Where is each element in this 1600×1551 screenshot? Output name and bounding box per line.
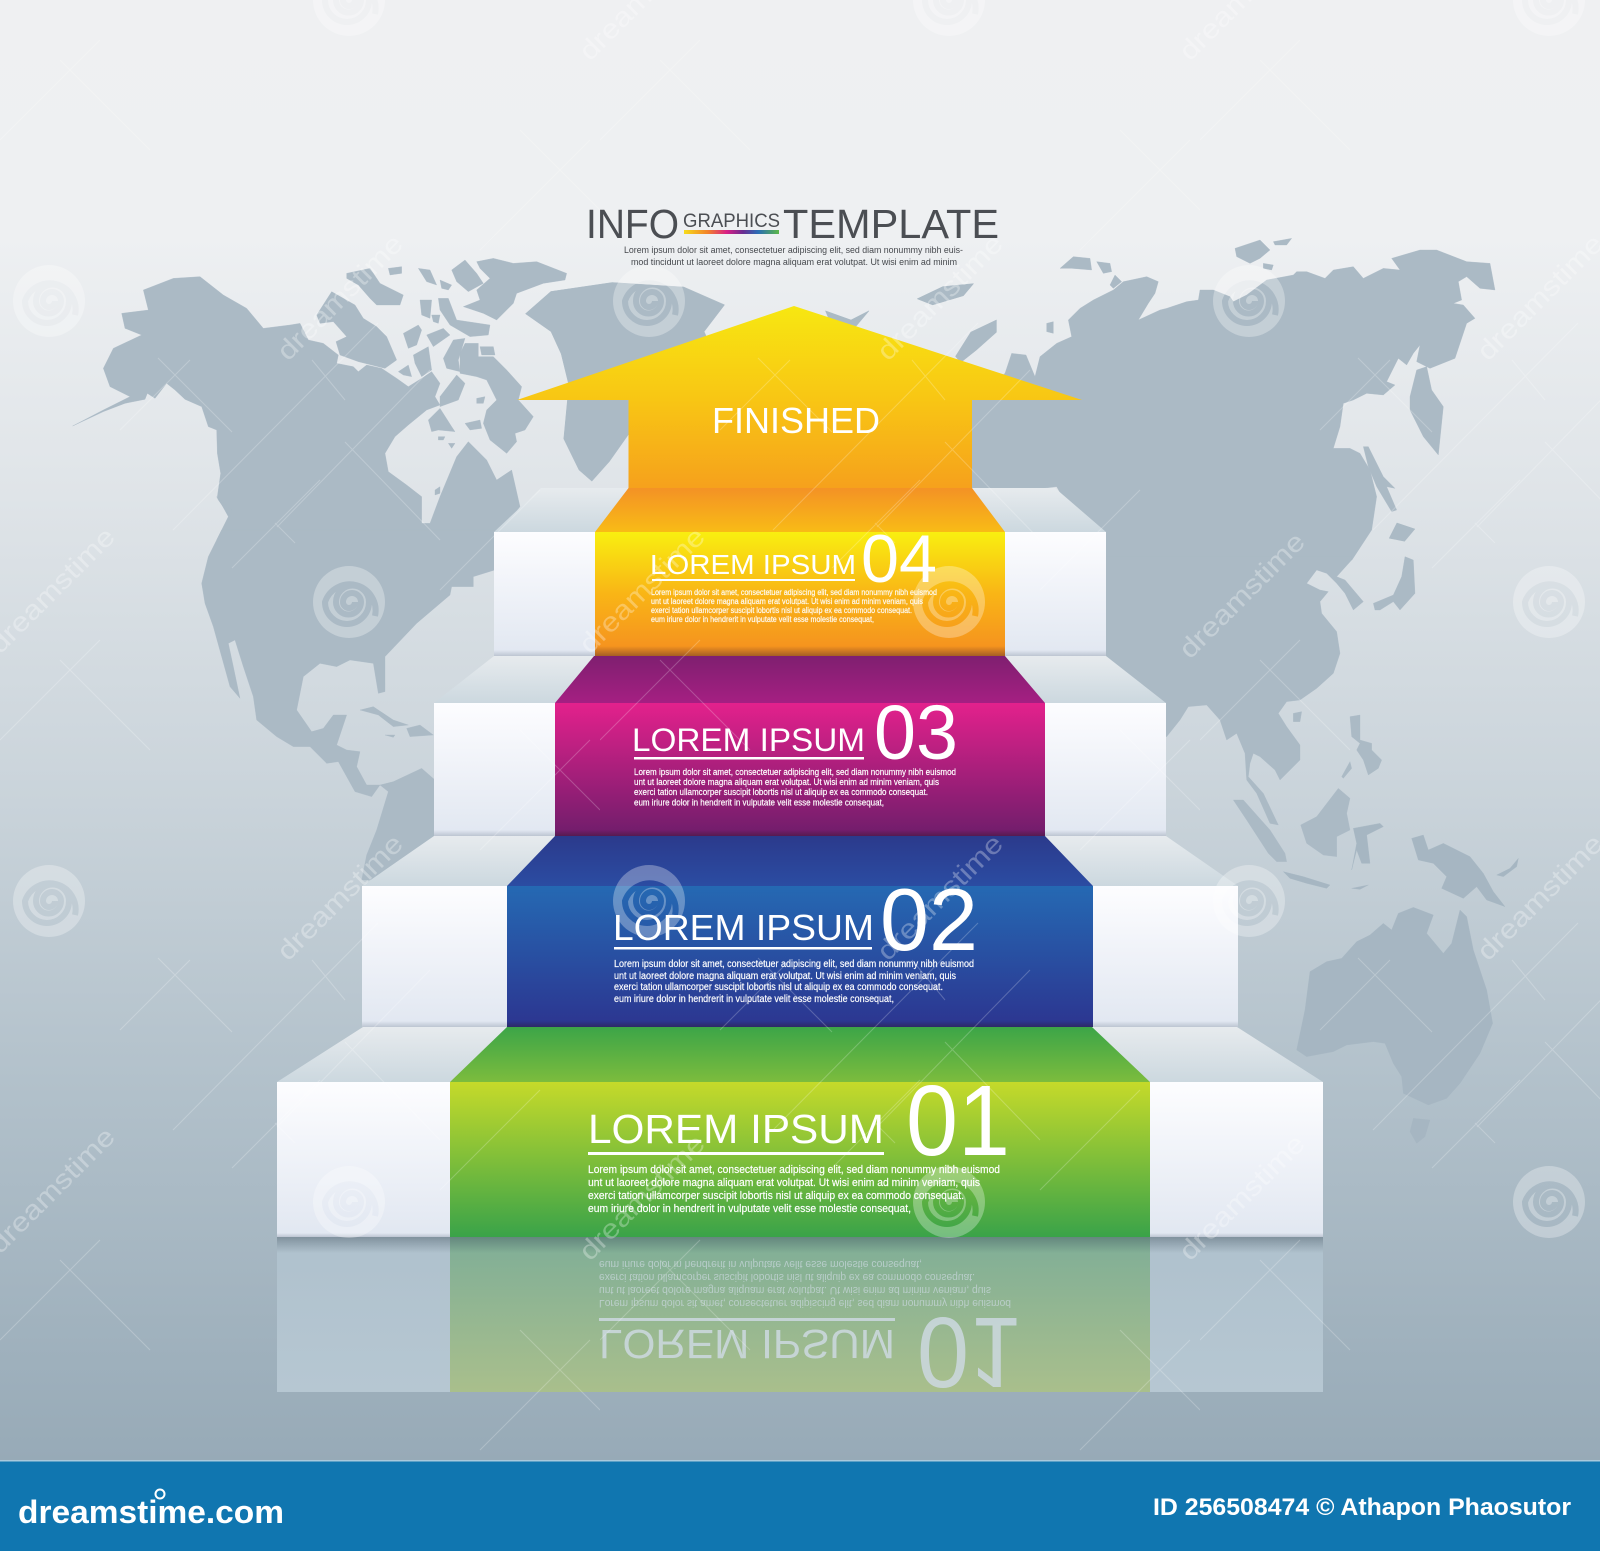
footer bar — [0, 1460, 1600, 1551]
step 02 blue tread — [507, 836, 1093, 886]
footer background — [0, 1461, 1600, 1551]
step 03 body text: Lorem ipsum dolor sit amet, consectetuer adipiscing elit, sed diam nonummy nibh euismod — [634, 767, 956, 777]
step 01 body text: eum iriure dolor in hendrerit in vulputate velit esse molestie consequat, — [588, 1203, 911, 1215]
step 04 body text: unt ut laoreet dolore magna aliquam erat volutpat. Ut wisi enim ad minim veniam, quis — [651, 597, 923, 606]
watermark spirals — [13, 0, 1585, 1238]
map: Greenland — [526, 282, 724, 481]
footer logo spiral — [156, 1490, 164, 1498]
step 01 number: 01 — [906, 1065, 1010, 1177]
subtitle — [624, 245, 963, 268]
step 04 body text: Lorem ipsum dolor sit amet, consectetuer adipiscing elit, sed diam nonummy nibh euismod — [651, 588, 937, 597]
step 01 body text: exerci tation ullamcorper suscipit lobortis nisl ut aliquip ex ea commodo consequat. — [588, 1190, 964, 1202]
step 03 body text: unt ut laoreet dolore magna aliquam erat volutpat. Ut wisi enim ad minim veniam, quis — [634, 777, 940, 787]
watermark words: dreamstime — [271, 228, 409, 366]
step 01 — [277, 1027, 1323, 1237]
step 04 riser dark edge — [595, 646, 1005, 656]
step 02 riser shadow — [362, 1021, 1238, 1027]
step 03 body text: eum iriure dolor in hendrerit in vulputate velit esse molestie consequat, — [634, 798, 884, 808]
step 01 riser shadow — [277, 1233, 1323, 1237]
watermark words: dreamstime — [1471, 828, 1600, 966]
step 01 body text: unt ut laoreet dolore magna aliquam erat volutpat. Ut wisi enim ad minim veniam, quis — [588, 1177, 980, 1189]
step 01 green tread — [450, 1027, 1150, 1082]
finished arrow — [517, 306, 1082, 488]
reflection: step shadow — [277, 1237, 1323, 1253]
footer credit: ID 256508474 © Athapon Phaosutor — [1153, 1494, 1571, 1521]
step 02 — [362, 836, 1238, 1027]
step 04 body text: exerci tation ullamcorper suscipit lobortis nisl ut aliquip ex ea commodo consequat. — [651, 606, 912, 615]
step 01 white riser — [277, 1082, 1323, 1237]
step 02 riser dark edge — [507, 1021, 1093, 1027]
watermark words: dreamstime — [871, 828, 1009, 966]
step 01 underline — [588, 1152, 884, 1155]
step 04 body text — [651, 588, 937, 624]
reflection: mirrored text: 01 — [917, 1296, 1021, 1408]
map: North, Central and South America — [202, 497, 500, 880]
step 02 number: 02 — [880, 870, 978, 969]
footer logo text: dreamstime.com — [18, 1494, 284, 1530]
arrow shape — [517, 306, 1082, 488]
watermark words: dreamstime — [871, 228, 1009, 366]
step 01 white tread — [277, 1027, 1323, 1082]
reflection: mirrored text: exerci tation ullamcorper suscipit lobortis nisl ut aliquip ex ea commodo consequat. — [599, 1271, 975, 1283]
watermark words: dreamstime — [1173, 1128, 1311, 1266]
step 04 white tread — [494, 488, 1106, 532]
arrow label: FINISHED — [712, 400, 880, 441]
title word: INFO: INFO — [586, 201, 679, 247]
map: North Atlantic islands and Hokkaido — [826, 284, 1415, 541]
step 03 magenta tread — [555, 656, 1045, 703]
watermark words: dreamstime — [573, 521, 711, 659]
map: Indonesia, New Guinea and Australia — [1283, 823, 1518, 1143]
step 02 body text: Lorem ipsum dolor sit amet, consectetuer adipiscing elit, sed diam nonummy nibh euismod — [614, 959, 974, 970]
reflection: green band — [450, 1237, 1150, 1392]
step 04 underline — [652, 579, 855, 581]
step 03 number: 03 — [874, 690, 958, 776]
watermark words: dreamstime — [1173, 526, 1311, 664]
map: Northern Eurasia — [972, 238, 1495, 563]
step 04 white riser — [494, 532, 1106, 656]
step 03 — [434, 656, 1166, 836]
title word: GRAPHICS: GRAPHICS — [683, 210, 780, 232]
reflection: white step left — [277, 1237, 450, 1392]
step 02 blue riser — [507, 886, 1093, 1027]
reflection: mirrored text — [599, 1258, 1021, 1408]
step 03 riser dark edge — [555, 830, 1045, 836]
step 03 body text: exerci tation ullamcorper suscipit lobortis nisl ut aliquip ex ea commodo consequat. — [634, 787, 928, 797]
step 02 body text: eum iriure dolor in hendrerit in vulputate velit esse molestie consequat, — [614, 994, 894, 1005]
reflection: mirrored text: eum iriure dolor in hendrerit in vulputate velit esse molestie consequat, — [599, 1258, 922, 1270]
step 02 body text: unt ut laoreet dolore magna aliquam erat volutpat. Ut wisi enim ad minim veniam, quis — [614, 971, 956, 982]
watermark words: dreamstime — [271, 828, 409, 966]
title — [586, 201, 999, 268]
step 01 body text — [588, 1164, 1000, 1215]
step 01 body text: Lorem ipsum dolor sit amet, consectetuer adipiscing elit, sed diam nonummy nibh euismod — [588, 1164, 1000, 1176]
step 02 heading: LOREM IPSUM — [613, 907, 874, 948]
reflection: mirrored text: Lorem ipsum dolor sit amet, consectetuer adipiscing elit, sed diam nonummy nibh euismod — [599, 1297, 1011, 1309]
rainbow underline — [684, 230, 779, 234]
step 03 white tread — [434, 656, 1166, 703]
step 02 body text — [614, 959, 974, 1005]
step 04 — [494, 488, 1106, 656]
step 01 heading: LOREM IPSUM — [588, 1106, 884, 1152]
footer top line — [0, 1460, 1600, 1462]
step 03 white riser — [434, 703, 1166, 836]
step 02 underline — [614, 947, 872, 950]
step 03 riser shadow — [434, 830, 1166, 836]
step 01 green riser — [450, 1082, 1150, 1237]
reflection: white step right — [1150, 1237, 1323, 1392]
map: China, Korea, Southeast Asia and Japan — [1080, 557, 1415, 862]
subtitle: Lorem ipsum dolor sit amet, consectetuer adipiscing elit, sed diam nonummy nibh euis- — [624, 245, 963, 256]
reflection on floor — [277, 1237, 1323, 1408]
subtitle: mod tincidunt ut laoreet dolore magna aliquam erat volutpat. Ut wisi enim ad minim — [631, 257, 957, 268]
step 03 magenta riser — [555, 703, 1045, 836]
step 04 body text: eum iriure dolor in hendrerit in vulputate velit esse molestie consequat, — [651, 615, 874, 624]
watermark words: dreamstime — [573, 1128, 711, 1266]
step 04 orange tread — [595, 488, 1005, 532]
step 02 white riser — [362, 886, 1238, 1027]
step 04 riser shadow — [494, 650, 1106, 656]
step 04 number: 04 — [861, 521, 937, 597]
reflection: mirrored text: unt ut laoreet dolore magna aliquam erat volutpat. Ut wisi enim ad minim veniam, quis — [599, 1284, 991, 1296]
world map — [73, 238, 1518, 1143]
reflection: mirrored text: LOREM IPSUM — [599, 1321, 895, 1367]
step 03 heading: LOREM IPSUM — [632, 722, 865, 758]
step 02 white tread — [362, 836, 1238, 886]
step 03 underline — [634, 757, 864, 760]
step 03 body text — [634, 767, 956, 808]
map: North America north and Arctic islands — [73, 258, 567, 540]
step 04 orange riser — [595, 532, 1005, 656]
watermark words: dreamstime — [1471, 228, 1600, 366]
title word: TEMPLATE: TEMPLATE — [783, 201, 999, 247]
step 02 body text: exerci tation ullamcorper suscipit lobortis nisl ut aliquip ex ea commodo consequat. — [614, 982, 943, 993]
step 04 heading: LOREM IPSUM — [650, 549, 856, 580]
